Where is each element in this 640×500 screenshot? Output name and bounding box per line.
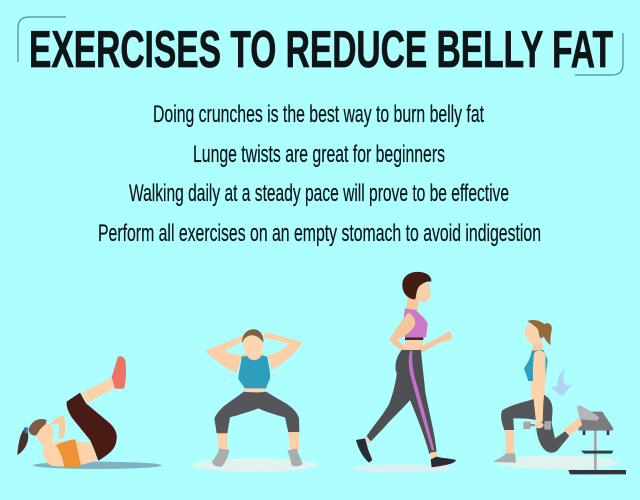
tip 2: Lunge twists are great for beginners [193,141,445,168]
icon: dumbbell [523,421,551,430]
figure: lunge with dumbbells [493,320,626,474]
title frame [18,17,623,75]
figure: crunches [17,356,162,469]
figure: walking [353,272,456,472]
icon: downward arrow [551,369,572,396]
text block: tips [98,101,541,247]
figure: squat [192,329,318,472]
